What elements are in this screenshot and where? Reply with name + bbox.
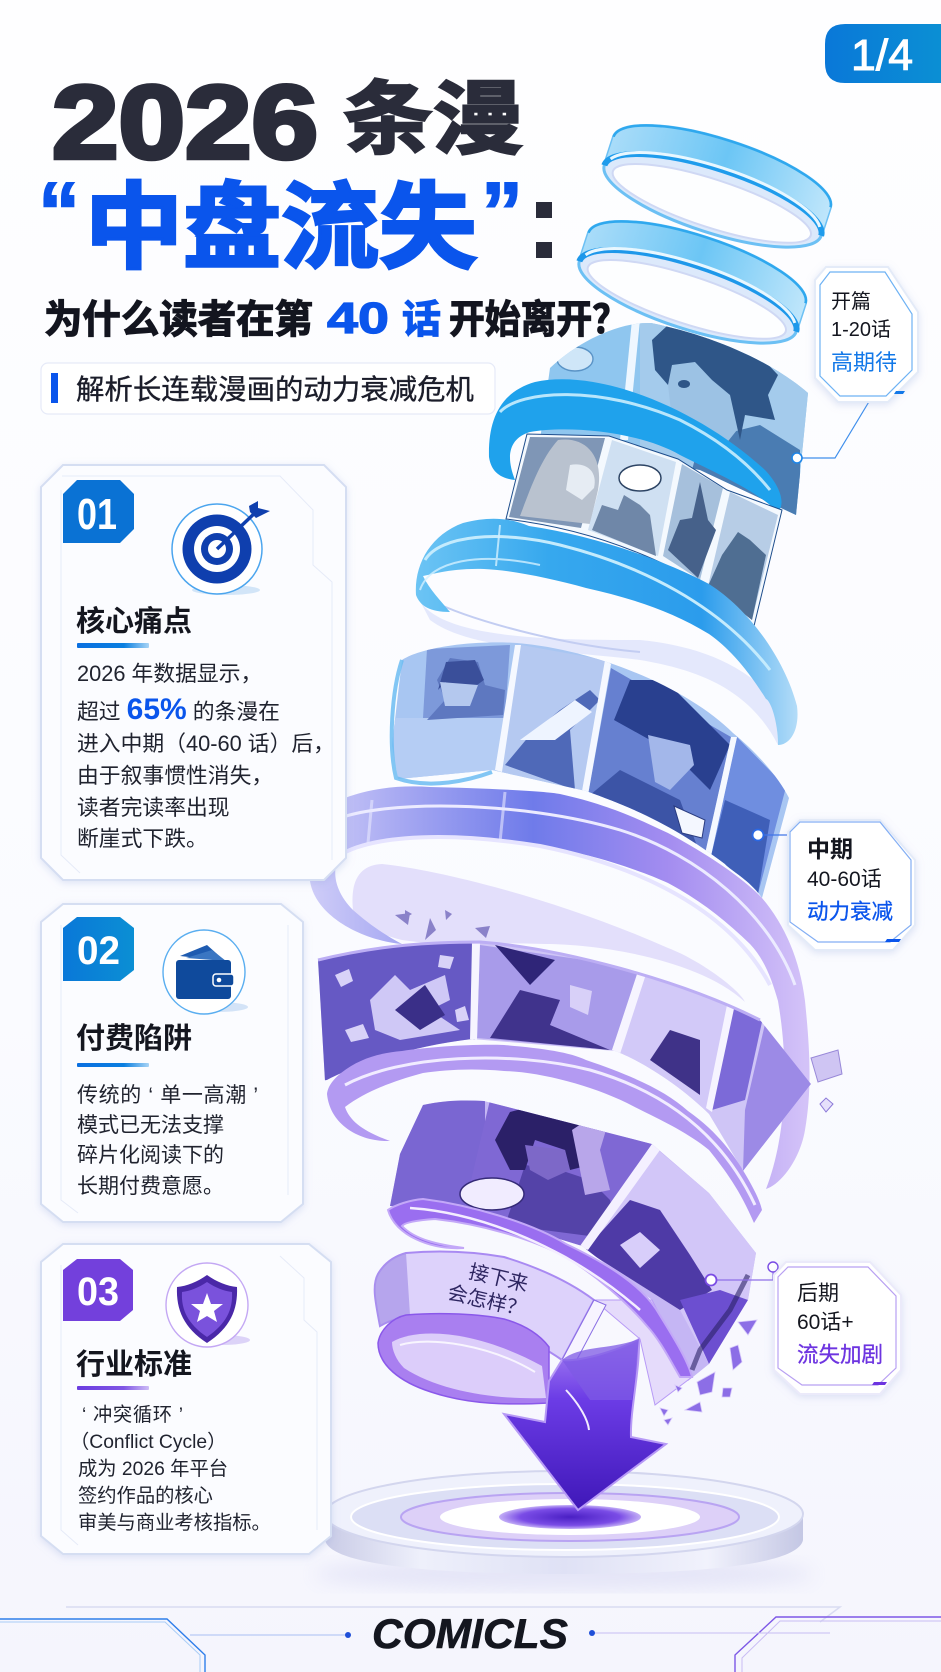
shards (660, 1320, 757, 1425)
lower film ribbon with question (375, 1252, 606, 1404)
question text (445, 1257, 534, 1321)
body text: 2026 年数据显示， (77, 661, 262, 686)
purple ribbon under troubled character (388, 1199, 748, 1377)
callout: opening: 开篇 (831, 290, 871, 313)
badge 02 (63, 917, 134, 981)
footer logo: COMICLS (372, 1610, 568, 1657)
icon: target (172, 501, 270, 595)
callout: late stage (706, 1262, 901, 1394)
body text (77, 661, 335, 851)
title line 2: “ (38, 165, 80, 259)
panel 01 core pain point (41, 465, 346, 880)
body text: 由于叙事惯性消失， (77, 763, 273, 788)
callout: late stage: 后期 (797, 1282, 839, 1305)
subtitle box: 解析长连载漫画的动力衰减危机 (76, 374, 474, 405)
body text: （Conflict Cycle） (70, 1431, 226, 1453)
title line 1: 2026 (52, 65, 318, 181)
body text (70, 1404, 271, 1534)
callout: late stage: 流失加剧 (797, 1343, 883, 1367)
body text: 进入中期（40-60 话）后， (77, 731, 335, 756)
panel 02 payment trap (41, 904, 303, 1222)
explosion section top rim (318, 942, 760, 1020)
heading: 付费陷阱 (76, 1022, 192, 1055)
body text (77, 1084, 258, 1198)
glass band under ring 5 (352, 864, 745, 1002)
title line 3: 话 (402, 299, 441, 342)
comic panels: opening, man in profile (540, 323, 808, 515)
callout: opening (792, 267, 918, 463)
comic panels: mid section boy, debris, man (385, 635, 800, 905)
title line 3: 开始离开？ (449, 299, 628, 342)
body text: 审美与商业考核指标。 (78, 1512, 271, 1534)
body text: 长期付费意愿。 (77, 1175, 224, 1198)
title line 2: 中盘流失 (85, 175, 477, 280)
page number badge (825, 24, 941, 83)
purple-blue band 5 (310, 786, 810, 1189)
icon: wallet (163, 930, 248, 1014)
body text: ‘ 冲突循环 ’ (82, 1404, 183, 1426)
arrow (504, 1339, 666, 1510)
callout: midpoint: 40-60话 (807, 868, 882, 891)
body text: 传统的 ‘ 单一高潮 ’ (77, 1084, 258, 1107)
page number badge: 1/4 (851, 31, 913, 80)
title line 3 (44, 294, 628, 343)
question text: 接下来 (467, 1260, 530, 1296)
callout: midpoint: 动力衰减 (807, 900, 893, 924)
purple band under explosion section (327, 1045, 842, 1223)
glass wrap beside arrow (594, 1300, 692, 1405)
platform (314, 1471, 814, 1590)
callout: late stage: 60话+ (797, 1311, 854, 1334)
title line 1 (52, 65, 523, 181)
body text: 超过 65% 的条漫在 (77, 693, 280, 726)
title line 3: 40 (327, 294, 389, 343)
title line 3: 为什么读者在第 (44, 299, 313, 342)
blue rim 3 (489, 379, 782, 512)
badge 03 (63, 1259, 133, 1321)
panel 03 industry standard (41, 1244, 331, 1554)
callout: opening: 1-20话 (831, 318, 891, 341)
body text: 读者完读率出现 (77, 795, 230, 820)
heading: 核心痛点 (76, 605, 192, 638)
comic panels: troubled character (385, 1095, 760, 1385)
title line 1: 条漫 (343, 75, 523, 164)
callout: midpoint (752, 820, 915, 950)
body text: 碎片化阅读下的 (77, 1144, 224, 1167)
subtitle box (41, 363, 495, 414)
body text: 签约作品的核心 (78, 1485, 213, 1507)
blue band 4 (416, 519, 798, 745)
badge 01: 01 (77, 490, 117, 539)
comic panels: woman, speech bubble, city (506, 434, 782, 626)
body text: 成为 2026 年平台 (78, 1458, 228, 1480)
callout: opening: 高期待 (831, 350, 897, 375)
comic panels: explosion section (310, 935, 820, 1175)
ring 2 (569, 202, 815, 362)
footer decoration (0, 1607, 941, 1672)
badge 02: 02 (77, 929, 120, 973)
ring 1 top (594, 106, 840, 266)
badge 01 (63, 480, 134, 543)
title line 2 (38, 165, 552, 280)
icon: shield (166, 1263, 250, 1347)
body text: 断崖式下跌。 (77, 826, 208, 851)
body text: 模式已无法支撑 (77, 1114, 224, 1137)
title line 2: ” (481, 165, 523, 259)
mid section outer edge (392, 660, 492, 784)
question text: 会怎样？ (445, 1281, 529, 1321)
heading: 行业标准 (76, 1348, 192, 1381)
badge 03: 03 (77, 1270, 119, 1314)
callout: midpoint: 中期 (807, 836, 853, 862)
